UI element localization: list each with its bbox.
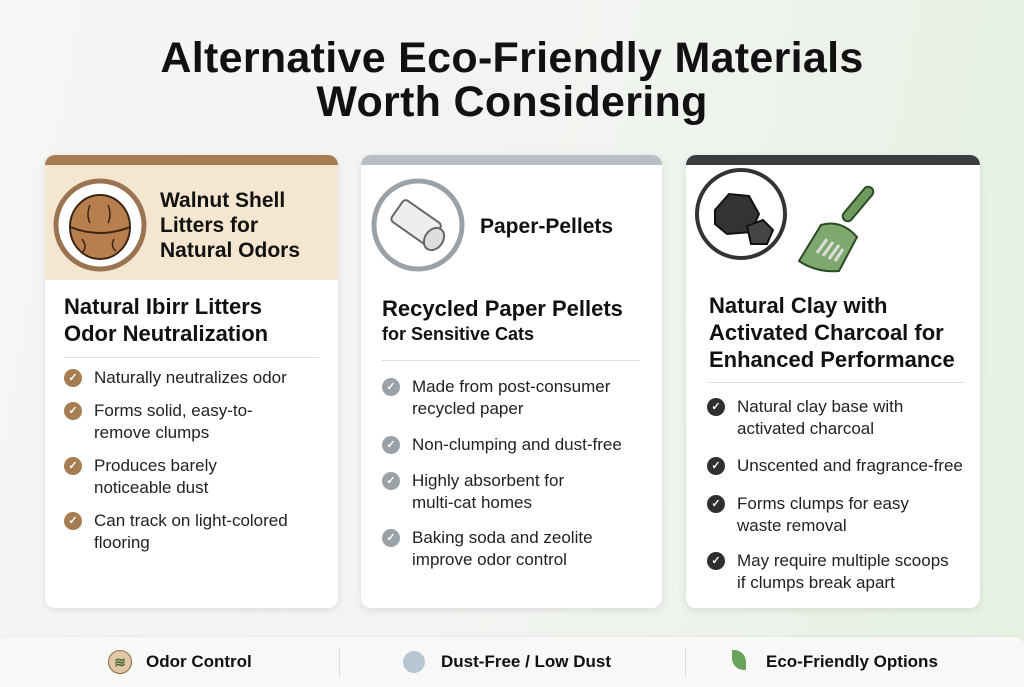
panel: paper pellets: for Sensitive Cats [382,324,534,344]
heading [709,293,955,372]
bullets: flooring [94,533,150,552]
bullets: ✓ [386,381,396,393]
header text: Litters for [160,214,258,237]
footer strip [0,637,1024,687]
heading: Enhanced Performance [709,347,955,372]
bullets: Baking soda and zeolite [412,528,593,547]
heading [64,294,268,346]
legend: eco-friendly: Eco-Friendly Options [766,652,938,671]
legend: odor control: Odor Control [146,652,252,671]
bullets: ✓ [68,372,78,384]
bullets: Forms solid, easy-to- [94,401,253,420]
heading: Natural Clay with [709,293,887,318]
bullets [64,368,288,552]
bullets: waste removal [737,516,847,535]
bullets: ✓ [68,405,78,417]
panel: clay charcoal [686,155,980,608]
bullets: ✓ [386,532,396,544]
bullets: Naturally neutralizes odor [94,368,287,387]
title: Worth Considering [316,78,708,126]
icon: walnut [54,178,146,272]
bullets: Can track on light-colored [94,511,288,530]
header band [45,165,338,280]
bullets: ✓ [68,515,78,527]
bullets: Forms clumps for easy [737,494,909,513]
icon: paper roll [372,178,464,272]
header text: Paper-Pellets [480,215,613,238]
bullets: ✓ [711,555,721,567]
bullets: ✓ [386,439,396,451]
bullets: ✓ [711,401,721,413]
icon: charcoal [695,168,787,260]
bullets: Unscented and fragrance-free [737,456,963,475]
bullets: improve odor control [412,550,567,569]
bullets: activated charcoal [737,419,874,438]
legend: odor control [108,650,252,674]
header text [160,189,300,262]
bullets: ✓ [386,475,396,487]
bullets: if clumps break apart [737,573,895,592]
bullets: noticeable dust [94,478,208,497]
bullets: multi-cat homes [412,493,532,512]
heading: Recycled Paper Pellets [382,296,623,321]
bullets: Natural clay base with [737,397,903,416]
header text: Walnut Shell [160,189,285,212]
bullets: May require multiple scoops [737,551,949,570]
title [160,34,864,126]
heading: Activated Charcoal for [709,320,944,345]
bullets: Non-clumping and dust-free [412,435,622,454]
legend: odor control: ≋ [114,654,126,670]
heading: Odor Neutralization [64,321,268,346]
legend: dust-free: Dust-Free / Low Dust [441,652,611,671]
heading: Natural Ibirr Litters [64,294,262,319]
panel: paper pellets [361,155,662,608]
header text: Natural Odors [160,239,300,262]
bullets: ✓ [711,498,721,510]
title: Alternative Eco-Friendly Materials [160,34,864,82]
bullets [382,377,622,569]
icon: scoop [798,186,874,272]
bullets: ✓ [711,460,721,472]
bullets: Highly absorbent for [412,471,564,490]
bullets: ✓ [68,460,78,472]
panel: walnut shell [45,155,338,608]
bullets: recycled paper [412,399,524,418]
bullets: Made from post-consumer [412,377,610,396]
bullets [707,397,963,592]
bullets: Produces barely [94,456,217,475]
bullets: remove clumps [94,423,209,442]
